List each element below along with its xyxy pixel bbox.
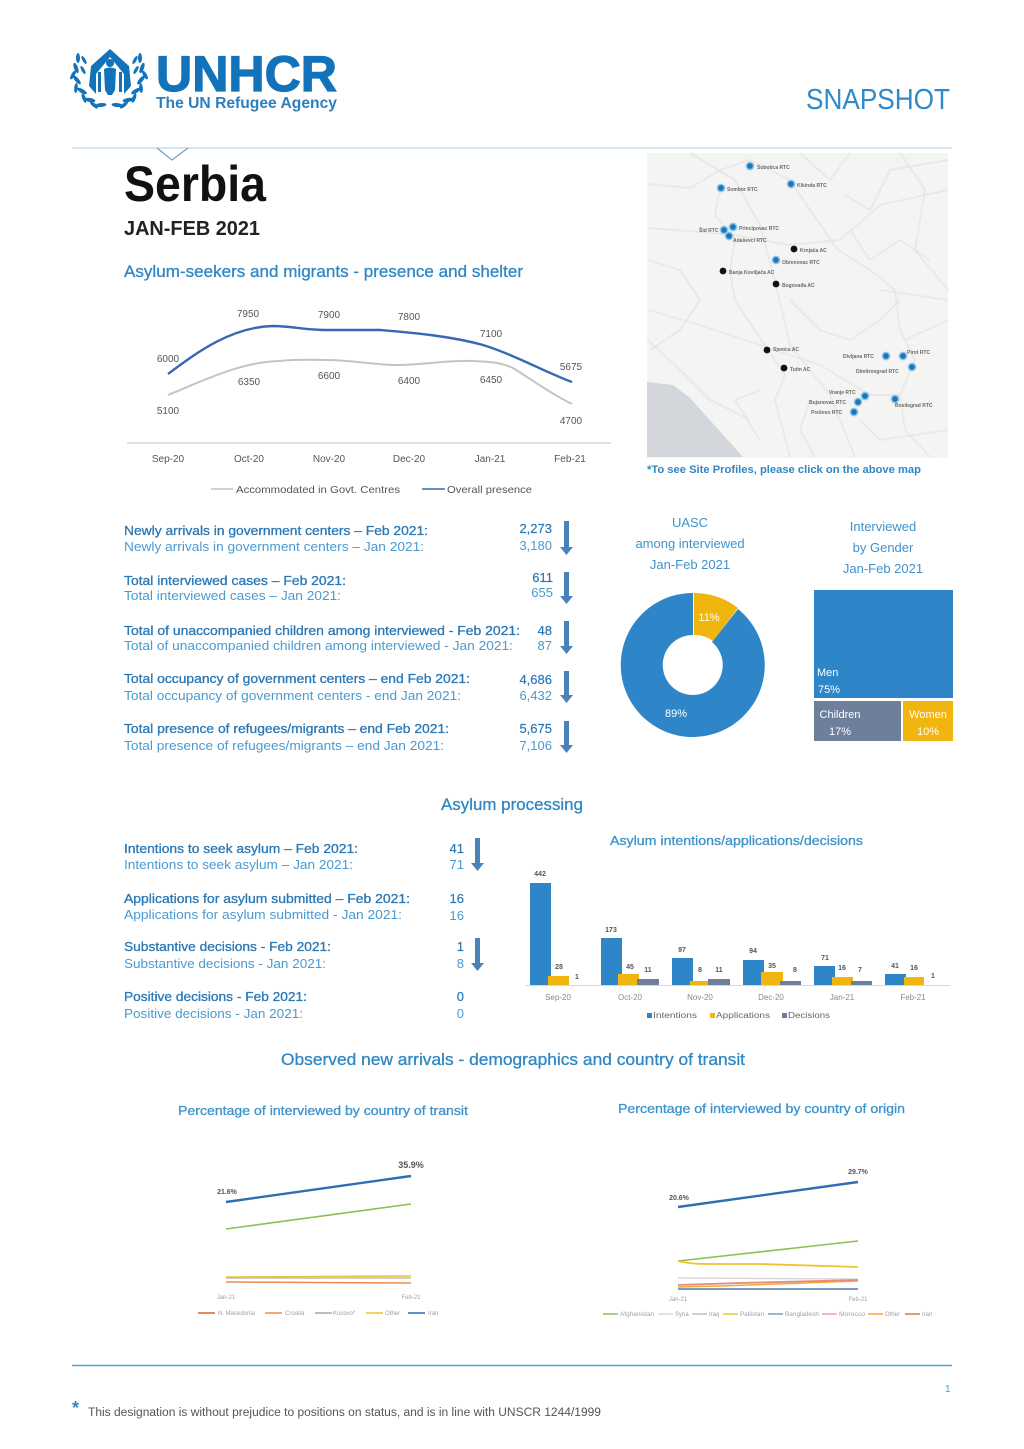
stat: positive decisions: Positive decisions - Jan 2021: [124, 1006, 303, 1021]
stat: total presence [124, 721, 573, 753]
site labels: Bogovađa AC [782, 283, 815, 289]
bar values: 16 [910, 965, 918, 972]
line chart: country of transit: 21.6% [217, 1189, 238, 1196]
stat: positive decisions: Positive decisions - Feb 2021: [124, 989, 307, 1004]
bar values: 8 [793, 967, 797, 974]
site labels: Subotica RTC [757, 165, 790, 171]
bar values [534, 871, 935, 981]
map note: *To see Site Profiles, please click on the above map [647, 464, 921, 476]
bar values: 97 [678, 947, 686, 954]
women: Women [909, 709, 947, 721]
footnote: * [72, 1398, 79, 1418]
stat: unaccompanied children: Total of unaccompanied children among interviewed - Jan 2021: [124, 638, 513, 653]
site labels: Kikinda RTC [797, 183, 827, 189]
women: 10% [917, 726, 939, 738]
bar values: 94 [749, 948, 757, 955]
title: Serbia [124, 156, 267, 212]
borders and roads [648, 153, 948, 457]
data labels: 6000 [157, 354, 180, 365]
data labels [157, 309, 583, 427]
label: SNAPSHOT: SNAPSHOT [806, 84, 950, 116]
chart title: gender [843, 519, 923, 576]
data labels: 7100 [480, 329, 503, 340]
stat: interviewed cases: Total interviewed cases – Feb 2021: [124, 573, 346, 588]
line chart: country of origin: 29.7% [848, 1169, 869, 1176]
blue sites: reception centres [717, 162, 916, 416]
chart title: gender: Jan-Feb 2021 [843, 561, 923, 576]
bar values: 16 [838, 965, 846, 972]
legend [198, 1311, 438, 1317]
x axis labels: Sep-20 [152, 454, 185, 465]
heading: observed new arrivals: Observed new arrivals - demographics and country of transit [281, 1050, 745, 1069]
site labels: Banja Koviljača AC [729, 270, 775, 276]
chart title: transit: Percentage of interviewed by country of transit [178, 1103, 468, 1118]
decisions bars [637, 979, 872, 985]
women [903, 701, 953, 741]
stat: new arrivals: 3,180 [519, 538, 552, 553]
site labels: Adaševci RTC [733, 238, 767, 244]
data labels: 6450 [480, 375, 503, 386]
legend: Overall presence [447, 484, 532, 496]
line chart: country of transit: Feb-21 [401, 1295, 421, 1301]
black sites: asylum centres [720, 246, 797, 371]
stat: occupancy of government centers [124, 671, 573, 703]
legend: Afghanistan [620, 1312, 654, 1318]
legend [211, 484, 532, 496]
stat: substantive decisions: Substantive decisions - Feb 2021: [124, 939, 331, 954]
chart title: UASC [635, 515, 745, 572]
site labels: Obrenovac RTC [782, 260, 820, 266]
x axis labels: Jan-21 [830, 993, 855, 1002]
bar values: 11 [715, 967, 723, 974]
children: Children [820, 709, 860, 721]
stat: occupancy of government centers: Total occupancy of government centers – end Feb 2021: [124, 671, 470, 686]
line: overall presence [168, 326, 572, 382]
line chart: country of origin [603, 1169, 932, 1318]
stat: intentions: Intentions to seek asylum – Feb 2021: [124, 841, 358, 856]
legend: Syria [675, 1312, 689, 1318]
stat: unaccompanied children: 48 [538, 623, 552, 638]
x axis labels: Sep-20 [545, 993, 571, 1002]
bar values: 45 [626, 964, 634, 971]
x axis labels [152, 454, 586, 465]
stat: intentions: 71 [450, 857, 464, 872]
legend: Croatia [285, 1311, 305, 1317]
x axis labels: Nov-20 [687, 993, 713, 1002]
data labels: 5100 [157, 406, 180, 417]
map: sites [647, 153, 948, 458]
children: 17% [829, 726, 851, 738]
chart title: UASC: among interviewed [635, 536, 745, 551]
stat: applications [124, 891, 464, 923]
chart title: UASC: Jan-Feb 2021 [650, 557, 730, 572]
stat: positive decisions: 0 [457, 989, 464, 1004]
site labels: Krnjača AC [800, 248, 827, 254]
page number: 1 [945, 1384, 951, 1395]
chart title: origin: Percentage of interviewed by country of origin [618, 1101, 905, 1116]
stat: unaccompanied children [124, 621, 573, 654]
x axis labels: Feb-21 [900, 993, 926, 1002]
line chart: presence and shelter [127, 309, 611, 496]
stat: intentions: 41 [450, 841, 464, 856]
data labels: 6400 [398, 376, 421, 387]
men [814, 590, 953, 698]
legend: Decisions [788, 1011, 830, 1020]
donut chart: UASC: 89% [665, 708, 687, 720]
legend [647, 1011, 830, 1020]
site labels: Principovac RTC [739, 226, 779, 232]
stat: interviewed cases [124, 570, 573, 604]
stat: positive decisions [124, 989, 464, 1021]
intentions bars [530, 883, 906, 985]
legend: N. Macedonia [218, 1311, 256, 1317]
stat: intentions [124, 838, 484, 872]
data labels: 6350 [238, 377, 261, 388]
legend: Other [385, 1311, 400, 1317]
chart title: gender: by Gender [853, 540, 914, 555]
site labels: Sjenica AC [773, 347, 799, 353]
stat: applications: Applications for asylum submitted – Feb 2021: [124, 891, 410, 906]
line chart: country of origin: 20.6% [669, 1195, 690, 1202]
legend: Applications [716, 1011, 770, 1020]
x axis labels: Dec-20 [758, 993, 784, 1002]
wordmark: UNHCR [156, 46, 337, 102]
x axis labels [545, 993, 926, 1002]
men: 75% [818, 684, 840, 696]
stat: new arrivals: Newly arrivals in government centers – Feb 2021: [124, 523, 428, 538]
site labels: Vranje RTC [829, 390, 856, 396]
footnote [72, 1398, 601, 1419]
x axis labels: Dec-20 [393, 454, 426, 465]
site labels: Bujanovac RTC [809, 400, 846, 406]
legend: Morocco [839, 1312, 866, 1318]
site labels: Sombor RTC [727, 187, 758, 193]
legend [603, 1312, 932, 1318]
stat: new arrivals [124, 521, 573, 555]
stat: total presence: 7,106 [519, 738, 552, 753]
stat: new arrivals: Newly arrivals in government centers – Jan 2021: [124, 539, 424, 554]
line chart: country of transit: Jan-21 [217, 1295, 236, 1301]
line chart: country of transit: 35.9% [398, 1160, 424, 1170]
applications bars [548, 972, 924, 985]
stat: applications: 16 [450, 908, 464, 923]
bar values: 1 [931, 973, 935, 980]
stat: positive decisions: 0 [457, 1006, 464, 1021]
data labels: 7900 [318, 310, 341, 321]
data labels: 4700 [560, 416, 583, 427]
donut chart: UASC [621, 593, 765, 737]
bar values: 8 [698, 967, 702, 974]
line chart: country of origin: Feb-21 [848, 1297, 868, 1303]
legend: Kosovo* [333, 1311, 356, 1317]
donut chart: UASC: 11% [698, 612, 720, 624]
stat: total presence: Total presence of refugees/migrants – end Feb 2021: [124, 721, 449, 736]
stat: interviewed cases: 655 [531, 585, 553, 600]
bar values: 1 [575, 974, 579, 981]
treemap: gender [814, 590, 953, 741]
stat: occupancy of government centers: 4,686 [519, 672, 552, 687]
header rule with chevron [72, 148, 952, 160]
children [814, 701, 901, 741]
bar values: 35 [768, 963, 776, 970]
stat: substantive decisions [124, 938, 484, 971]
x axis labels: Oct-20 [618, 993, 643, 1002]
bar values: 11 [644, 967, 652, 974]
bar values: 28 [555, 964, 563, 971]
legend: Other [885, 1312, 900, 1318]
data labels: 6600 [318, 371, 341, 382]
chart title: UASC: UASC [672, 515, 708, 530]
footer rule [72, 1364, 952, 1366]
site labels: Divljana RTC [843, 354, 874, 360]
legend: Pakistan [740, 1312, 764, 1318]
line: accommodated in government centres [168, 360, 572, 404]
site labels: Tutin AC [790, 367, 811, 373]
site labels: Pirot RTC [907, 350, 930, 356]
legend: Iran [428, 1311, 438, 1317]
stat: unaccompanied children: Total of unaccompanied children among interviewed - Feb 2021: [124, 623, 520, 638]
stat: applications: 16 [450, 891, 464, 906]
line chart: country of transit [198, 1160, 438, 1317]
stat: substantive decisions: Substantive decisions - Jan 2021: [124, 956, 326, 971]
legend: Bangladesh [785, 1312, 819, 1318]
water [647, 382, 743, 457]
legend: Accommodated in Govt. Centres [236, 484, 400, 496]
heading: presence and shelter: Asylum-seekers and migrants - presence and shelter [124, 262, 523, 281]
men: Men [817, 667, 838, 679]
bar values: 71 [821, 955, 829, 962]
stat: interviewed cases: Total interviewed cases – Jan 2021: [124, 588, 341, 603]
chart title: asylum bars: Asylum intentions/applications/decisions [610, 833, 864, 848]
footnote: This designation is without prejudice to positions on status, and is in line with UNSCR 1244/1999 [88, 1407, 601, 1419]
data labels: 5675 [560, 362, 583, 373]
bar values: 442 [534, 871, 546, 878]
stat: occupancy of government centers: 6,432 [519, 688, 552, 703]
heading: asylum processing: Asylum processing [441, 795, 583, 814]
bar values: 41 [891, 963, 899, 970]
bar values: 7 [858, 967, 862, 974]
bar chart: intentions, applications, decisions [525, 871, 950, 1020]
data labels: 7800 [398, 312, 421, 323]
icon: UNHCR emblem [69, 49, 149, 110]
site labels: Dimitrovgrad RTC [856, 369, 899, 375]
stat: new arrivals: 2,273 [519, 521, 552, 536]
stat: total presence: Total presence of refugees/migrants – end Jan 2021: [124, 738, 444, 753]
stat: occupancy of government centers: Total occupancy of government centers - end Jan 2021: [124, 688, 461, 703]
data labels: 7950 [237, 309, 260, 320]
bar values: 173 [605, 927, 617, 934]
subtitle: period: JAN-FEB 2021 [124, 218, 260, 240]
tagline: The UN Refugee Agency [156, 95, 337, 112]
legend: Intentions [653, 1011, 697, 1020]
site labels [699, 165, 933, 416]
line chart: country of origin: Jan-21 [669, 1297, 688, 1303]
logo: UNHCR [69, 46, 337, 112]
stat: applications: Applications for asylum submitted - Jan 2021: [124, 907, 402, 922]
stat: interviewed cases: 611 [532, 570, 553, 585]
x axis labels: Oct-20 [234, 454, 264, 465]
stat: intentions: Intentions to seek asylum – Jan 2021: [124, 857, 353, 872]
stat: substantive decisions: 8 [457, 956, 464, 971]
legend: Iran [922, 1312, 932, 1318]
x axis labels: Jan-21 [475, 454, 506, 465]
site labels: Šid RTC [699, 226, 719, 234]
site labels: Preševo RTC [811, 410, 843, 416]
legend: Iraq [709, 1312, 719, 1318]
stat: unaccompanied children: 87 [538, 638, 552, 653]
stat: total presence: 5,675 [519, 721, 552, 736]
site labels: Bosilegrad RTC [895, 403, 933, 409]
x axis labels: Feb-21 [554, 454, 586, 465]
panel: key figures [124, 521, 573, 753]
x axis labels: Nov-20 [313, 454, 346, 465]
panel: asylum figures [124, 838, 484, 1021]
chart title: gender: Interviewed [850, 519, 916, 534]
stat: substantive decisions: 1 [457, 939, 464, 954]
